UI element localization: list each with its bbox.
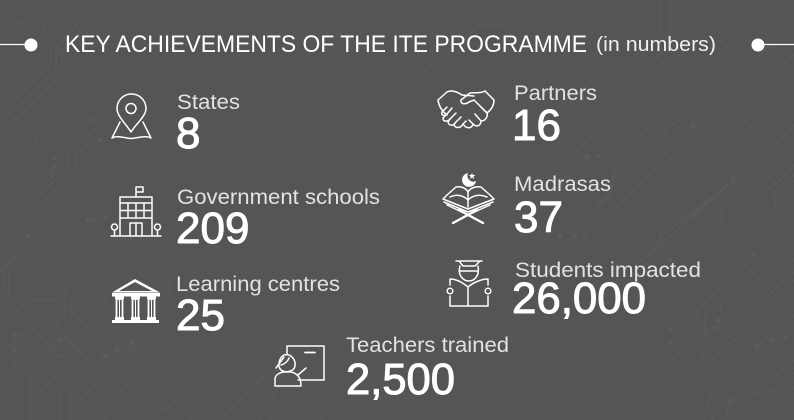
stat: states: 8 (176, 109, 200, 158)
stat: students impacted (447, 259, 701, 323)
stat: students impacted: 26,000 (512, 274, 646, 323)
stat: government schools (111, 186, 380, 253)
stat: partners (438, 82, 597, 150)
stat: teachers trained: Teachers trained (346, 334, 509, 357)
icon: student reading (447, 261, 491, 306)
stat: government schools: Government schools (177, 186, 380, 209)
icon: handshake (438, 91, 494, 128)
right title connector (752, 38, 794, 52)
title: KEY ACHIEVEMENTS OF THE ITE PROGRAMME (65, 31, 587, 58)
stat: states (112, 91, 240, 158)
icon: open book on stand with crescent (443, 173, 494, 223)
title: (in numbers) (596, 34, 716, 56)
stat: students impacted: Students impacted (515, 259, 701, 282)
stat: madrasas (443, 173, 611, 242)
stat: partners: Partners (514, 82, 597, 105)
stat: learning centres: 25 (176, 291, 225, 340)
stat: partners: 16 (512, 101, 561, 150)
stat: learning centres (112, 273, 340, 340)
stat: teachers trained (275, 334, 509, 404)
stat: learning centres: Learning centres (176, 273, 340, 296)
stat: madrasas: 37 (514, 193, 563, 242)
icon: teacher at board (275, 346, 324, 386)
stat: states: States (177, 91, 240, 114)
stat: teachers trained: 2,500 (346, 355, 455, 404)
stat: government schools: 209 (176, 204, 249, 253)
icon: school building (111, 187, 161, 236)
left title connector (0, 38, 38, 52)
icon: map pin (112, 94, 151, 138)
stat: madrasas: Madrasas (514, 173, 611, 196)
icon: classical building (112, 279, 160, 323)
